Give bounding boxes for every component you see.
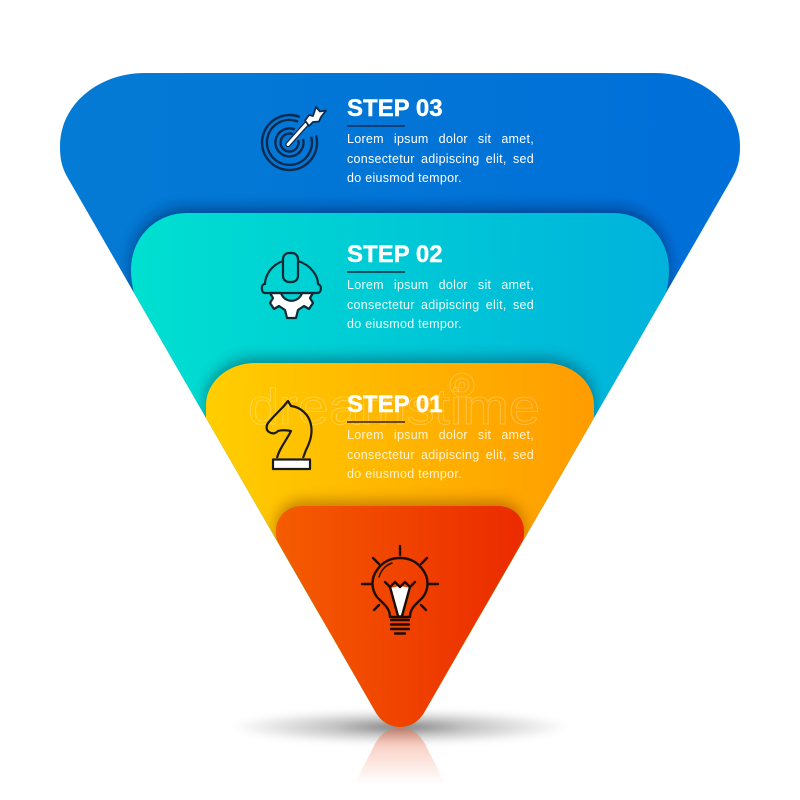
panel: step 03 blue layer (60, 73, 740, 727)
heading: step 03: STEP 03 (347, 95, 443, 122)
text block: step 01 (347, 391, 534, 481)
icon: chess knight (267, 401, 312, 469)
panel: step 01 yellow layer (206, 363, 594, 727)
underline (347, 125, 405, 127)
shadow of yellow layer (206, 358, 594, 520)
description (347, 132, 534, 185)
description: do eiusmod tempor. (347, 171, 462, 185)
description: do eiusmod tempor. (347, 317, 462, 331)
description: consectetur adipiscing elit, sed (347, 152, 534, 166)
text block: step 03 (347, 95, 534, 185)
description: consectetur adipiscing elit, sed (347, 298, 534, 312)
tip reflection (354, 728, 446, 785)
icon: light bulb (362, 546, 438, 634)
description: Lorem ipsum dolor sit amet, (347, 278, 534, 292)
shadow of red layer (276, 501, 524, 620)
description (347, 428, 534, 481)
description (347, 278, 534, 331)
panel: red tip layer (276, 506, 524, 727)
description: Lorem ipsum dolor sit amet, (347, 132, 534, 146)
heading: step 01: STEP 01 (347, 391, 443, 418)
underline (347, 271, 405, 273)
description: consectetur adipiscing elit, sed (347, 448, 534, 462)
infographic canvas (60, 73, 740, 779)
funnel artwork (60, 73, 740, 779)
icon: helmet with gear (262, 253, 321, 318)
description: do eiusmod tempor. (347, 467, 462, 481)
heading: step 02: STEP 02 (347, 241, 443, 268)
underline (347, 421, 405, 423)
description: Lorem ipsum dolor sit amet, (347, 428, 534, 442)
panel: step 02 teal layer (131, 213, 669, 727)
watermark: dreamstime (248, 379, 540, 435)
text block: step 02 (347, 241, 534, 331)
floor shadow (230, 710, 570, 744)
icon: target with dart (262, 107, 326, 170)
shadow of teal layer (131, 208, 669, 400)
